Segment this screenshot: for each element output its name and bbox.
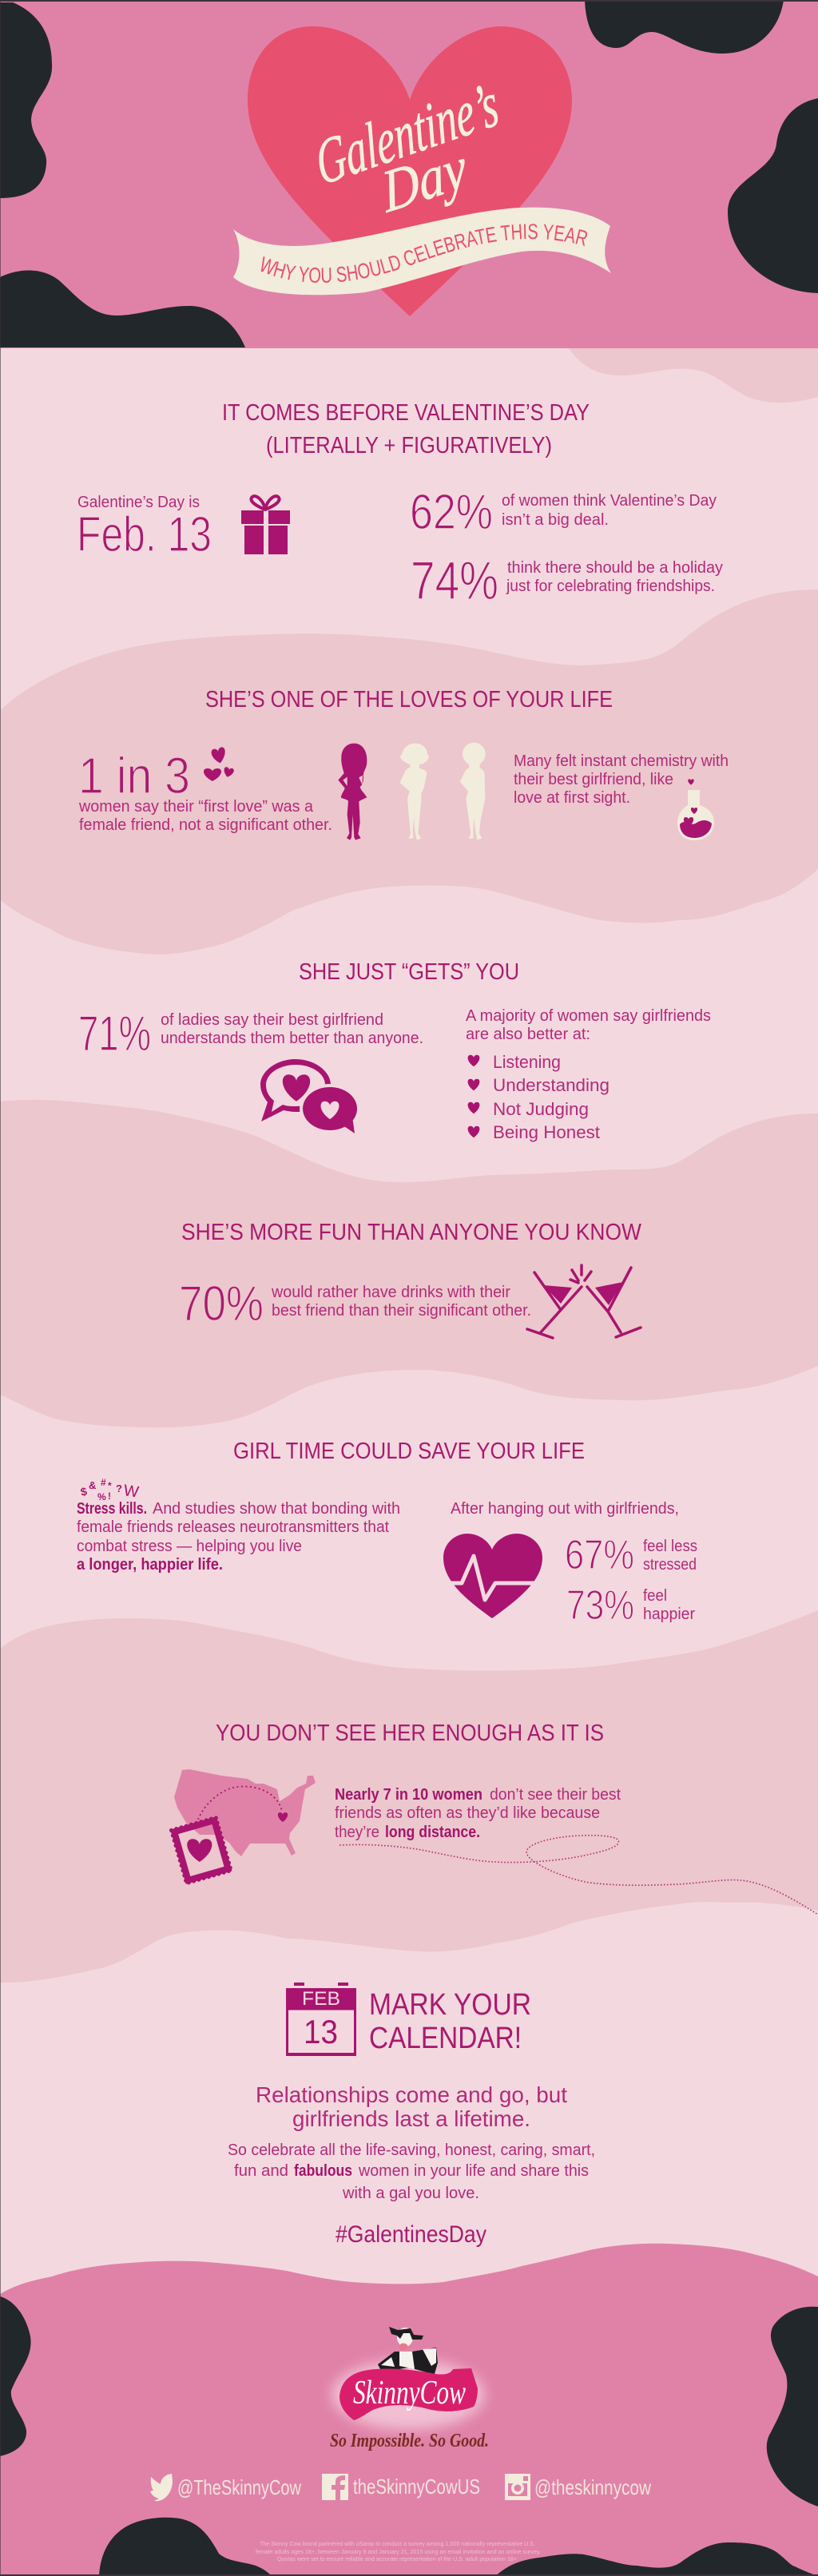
heading: GIRL TIME COULD SAVE YOUR LIFE [233,1439,585,1464]
icon: instagram [505,2474,530,2500]
heading: MARK YOUR [369,1988,531,2022]
panel: footer [0,2244,818,2576]
icon: stress symbols: ? [116,1482,122,1494]
stat: 1 in 3 [78,747,332,834]
icon: gift [241,496,290,554]
cow patch: footer bottom left [99,2518,272,2576]
stat: 1 in 3: 1 in 3 [78,747,190,804]
fine print: Quotas were set to ensure reliable and accurate representation of the U.S. adult population 18+ [277,2557,517,2562]
stat: 67%: stressed [643,1556,697,1574]
text: stress kills: female friends releases neurotransmitters that [77,1518,389,1536]
stat: 74%: think there should be a holiday [507,559,723,577]
heading [369,1988,531,2055]
icon: stress symbols: % [97,1491,106,1502]
icon: stamp [171,1817,231,1883]
twitter handle: @TheSkinnyCow [177,2475,301,2499]
text: stress kills: combat stress — helping you live [77,1538,302,1555]
stat: 74% [411,550,723,611]
text: instant chemistry: their best girlfriend, like [514,771,673,788]
stat: 74%: 74% [411,550,498,611]
stat: 62%: isn’t a big deal. [502,511,609,529]
list: qualities: Not Judging [493,1099,589,1119]
list: qualities: Understanding [493,1075,610,1095]
date text: Feb. 13 [77,507,212,562]
panel: don't see her enough [171,1721,818,1915]
icon: potion flask [677,779,714,840]
text: long distance [335,1786,621,1841]
ribbon [233,208,611,296]
stat: 67%: 67% [565,1532,634,1578]
fine print [256,2542,541,2562]
heading: YOU DON’T SEE HER ENOUGH AS IT IS [216,1721,604,1746]
text: instant chemistry: love at first sight. [514,789,630,807]
panel: one of the loves of your life [78,687,729,840]
text: instant chemistry [514,752,729,807]
icon: heart on map [278,1812,288,1822]
heading: SHE JUST “GETS” YOU [299,959,519,985]
stat: 71%: 71% [78,1006,151,1062]
text: celebrate: fun and [234,2162,288,2180]
stat: 62%: 62% [410,485,493,540]
stat: 71%: understands them better than anyone. [161,1030,423,1047]
stat: 67%: feel less [643,1538,697,1555]
panel: it comes before valentine's day [77,400,723,611]
text: long distance: friends as often as they’d like because [335,1804,600,1822]
cow patch: footer right [767,2307,818,2507]
logo: skinny cow [330,2327,489,2451]
icon: stress symbols: * [108,1480,112,1491]
icon: calendar [286,1983,356,2056]
background wave: fun section [0,1100,818,1427]
text: better at: are also better at: [466,1026,590,1043]
icon: silhouette cream 1 [400,744,429,840]
icon: silhouette magenta [338,744,367,840]
title [310,67,503,226]
icon: twitter [150,2474,173,2501]
text: stress kills: a longer, happier life. [77,1556,223,1574]
text: celebrate: fabulous [294,2162,352,2180]
icon: cocktail glasses [527,1265,641,1338]
text: stress kills [77,1500,400,1574]
icon: heart with pulse [442,1534,544,1618]
stat: 73%: feel [643,1587,667,1605]
stat: 71% [78,1006,423,1062]
facebook handle: theSkinnyCowUS [353,2475,480,2499]
fine print: The Skinny Cow brand partnered with uSamp to conduct a survey among 1,000 nationally representative U.S. [260,2542,535,2547]
text: stress kills: And studies show that bonding with [153,1500,400,1518]
icon: silhouette cream 2 [460,743,486,840]
icon: calendar: FEB [302,1988,340,2010]
icon: stress symbols: W [122,1482,140,1502]
icon: calendar: 13 [304,2013,338,2050]
heading: (LITERALLY + FIGURATIVELY) [266,433,552,458]
stat: 1 in 3: women say their “first love” was a [78,798,314,816]
text: long distance: Nearly 7 in 10 women [335,1786,482,1804]
logo glow [332,2360,485,2430]
tagline: So Impossible. So Good. [330,2431,489,2451]
social links [150,2474,651,2501]
background wave: distance section [0,1610,818,1983]
logo banner [340,2368,478,2420]
background wave: top right [569,348,818,403]
text: celebrate [228,2141,595,2202]
icon: stress symbols: ! [108,1490,111,1502]
heading: IT COMES BEFORE VALENTINE’S DAY [222,400,590,426]
stat: 71%: of ladies say their best girlfriend [161,1011,383,1029]
stat: 67% [565,1532,697,1578]
cow patch: top left [0,2,52,198]
heading: CALENDAR! [369,2022,522,2055]
stat: 70% [179,1276,531,1332]
text: relationships: Relationships come and go, but [256,2082,567,2107]
text: relationships [256,2082,567,2131]
text: relationships: girlfriends last a lifetime. [292,2106,530,2131]
cow patch: bottom left [0,271,245,347]
panel: header [0,2,818,348]
text: celebrate: So celebrate all the life-saving, honest, caring, smart, [228,2141,595,2159]
logo wordmark: SkinnyCow [353,2375,466,2411]
text: long distance: long distance. [385,1824,480,1841]
text: long distance: don’t see their best [490,1786,621,1804]
stat: 74%: just for celebrating friendships. [506,578,715,595]
list: qualities: Listening [493,1052,561,1072]
icon: stress symbols: $ [79,1485,88,1498]
stat: 73% [566,1582,695,1629]
instagram handle: @theskinnycow [534,2475,651,2499]
heading: SHE’S ONE OF THE LOVES OF YOUR LIFE [205,687,613,712]
cow patch: top right [585,0,784,54]
list: qualities: Being Honest [493,1122,600,1142]
panel: she just gets you [78,959,711,1142]
cow patch: footer left [0,2296,31,2456]
stat: 1 in 3: female friend, not a significant other. [79,816,332,834]
list: qualities [468,1052,610,1142]
text: better at [466,1007,711,1043]
heart [248,26,572,316]
text: celebrate: women in your life and share this [358,2162,589,2180]
date text [77,494,212,562]
icon: stress symbols: # [101,1477,106,1488]
icon: small hearts [204,747,234,781]
text: instant chemistry: Many felt instant chemistry with [514,752,729,770]
icon: stress symbols: & [89,1479,96,1491]
heading: SHE’S MORE FUN THAN ANYONE YOU KNOW [181,1220,642,1245]
map: USA [174,1769,316,1856]
background wave: loves section [0,589,818,955]
dotted route [198,1787,282,1820]
stat: 62%: of women think Valentine’s Day [502,492,717,510]
hashtag: #GalentinesDay [336,2221,486,2248]
cow patch: footer bottom right [495,2542,818,2576]
cow patch: right [728,98,818,293]
fine print: female adults ages 18+, between January 9 and January 21, 2015 using an email invitation and an online survey. [256,2550,541,2555]
text: celebrate: with a gal you love. [342,2185,479,2202]
text: stress kills: Stress kills. [77,1500,147,1518]
title: Day [377,134,472,226]
text: after hanging out: After hanging out with girlfriends, [451,1500,679,1518]
date text: Galentine’s Day is [77,494,200,511]
text: long distance: they’re [335,1824,379,1841]
heading [222,400,590,458]
panel: mark your calendar [228,1983,595,2248]
dotted flourish [340,1836,818,1915]
stat: 70%: best friend than their significant other. [272,1302,531,1320]
logo cow [378,2327,438,2374]
title: Galentine’s [310,67,503,200]
icon: chat bubbles [260,1059,360,1133]
text: better at: A majority of women say girlfriends [466,1007,711,1025]
icon: facebook [322,2474,348,2500]
stat: 62% [410,485,717,540]
stat: 70%: 70% [179,1276,264,1332]
ribbon: WHY YOU SHOULD CELEBRATE THIS YEAR [260,224,587,283]
icon: stress symbols [79,1477,140,1502]
panel: girl time [77,1439,697,1629]
panel: more fun [179,1220,642,1338]
stat: 73%: happier [643,1606,695,1623]
stat: 73%: 73% [566,1582,634,1629]
stat: 70%: would rather have drinks with their [271,1284,510,1301]
